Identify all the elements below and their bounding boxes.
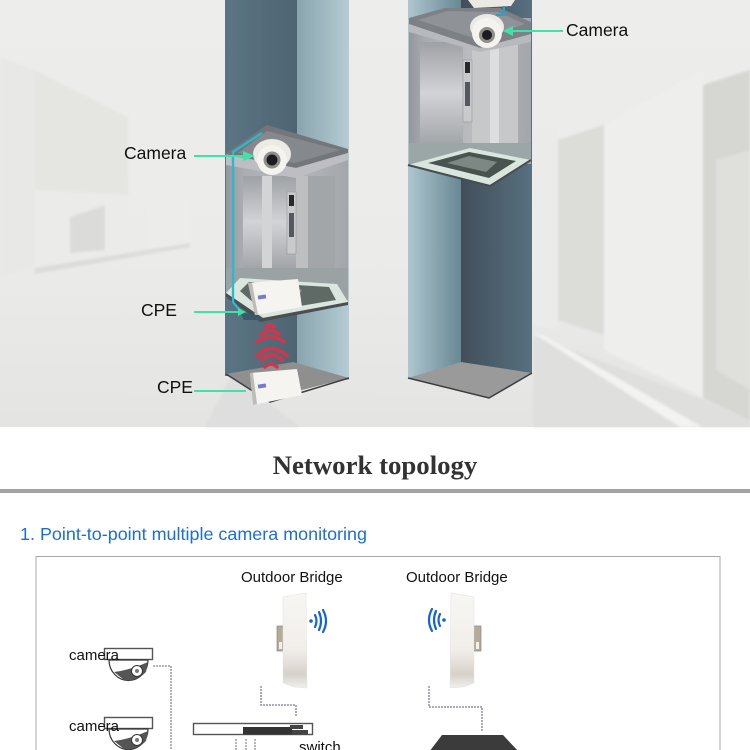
shaft walls left bbox=[225, 0, 349, 402]
icon: wifi waves right bbox=[429, 609, 446, 631]
icon: camera 2 bbox=[104, 718, 152, 750]
icon: red wireless signal bbox=[257, 325, 287, 367]
icon: network switch bbox=[194, 724, 312, 734]
icon: CPE on car floor bbox=[240, 279, 302, 320]
callout: CPE upper bbox=[141, 300, 246, 320]
subheading: point-to-point: 1. Point-to-point multiple camera monitoring bbox=[20, 524, 367, 544]
link: cameras to switch bbox=[153, 666, 171, 750]
elevator shaft left bbox=[225, 0, 349, 405]
panel: topology diagram bbox=[36, 556, 720, 750]
shaft walls right bbox=[408, 0, 532, 398]
icon: outdoor bridge left bbox=[277, 593, 307, 688]
elevator car right bbox=[408, 8, 531, 186]
callout: CPE lower bbox=[157, 377, 246, 397]
icon: black recorder bbox=[429, 735, 519, 750]
icon: camera 1 bbox=[104, 648, 152, 681]
callout: CPE upper: CPE bbox=[141, 300, 177, 320]
elevator shaft right bbox=[408, 0, 532, 398]
icon: CPE above car bbox=[468, 0, 515, 8]
elevator car left bbox=[226, 125, 348, 322]
hero background: hallway photo bbox=[0, 0, 750, 427]
callout: camera right: Camera bbox=[566, 20, 629, 40]
label: outdoor bridge right: Outdoor Bridge bbox=[406, 569, 508, 586]
label: outdoor bridge left: Outdoor Bridge bbox=[241, 569, 343, 586]
label: camera 2: camera bbox=[69, 718, 120, 735]
heading: network topology: Network topology bbox=[273, 450, 478, 480]
icon: wifi waves left bbox=[309, 610, 326, 632]
callout: camera left: Camera bbox=[124, 143, 187, 163]
label: camera 1: camera bbox=[69, 647, 120, 664]
link: left bridge to switch bbox=[261, 686, 296, 716]
links: switch downlinks bbox=[236, 739, 255, 750]
callout: camera left bbox=[124, 143, 255, 163]
divider bar bbox=[0, 489, 750, 493]
icon: outdoor bridge right bbox=[450, 593, 481, 688]
icon: dome camera right bbox=[470, 14, 504, 48]
cable to camera bbox=[233, 133, 262, 313]
callout: CPE lower: CPE bbox=[157, 377, 193, 397]
callout: camera right bbox=[503, 20, 629, 40]
link: right bridge to recorder bbox=[429, 686, 482, 732]
icon: dome camera left bbox=[253, 139, 291, 175]
icon: CPE on shaft floor bbox=[250, 369, 302, 405]
cable right bbox=[496, 6, 504, 15]
